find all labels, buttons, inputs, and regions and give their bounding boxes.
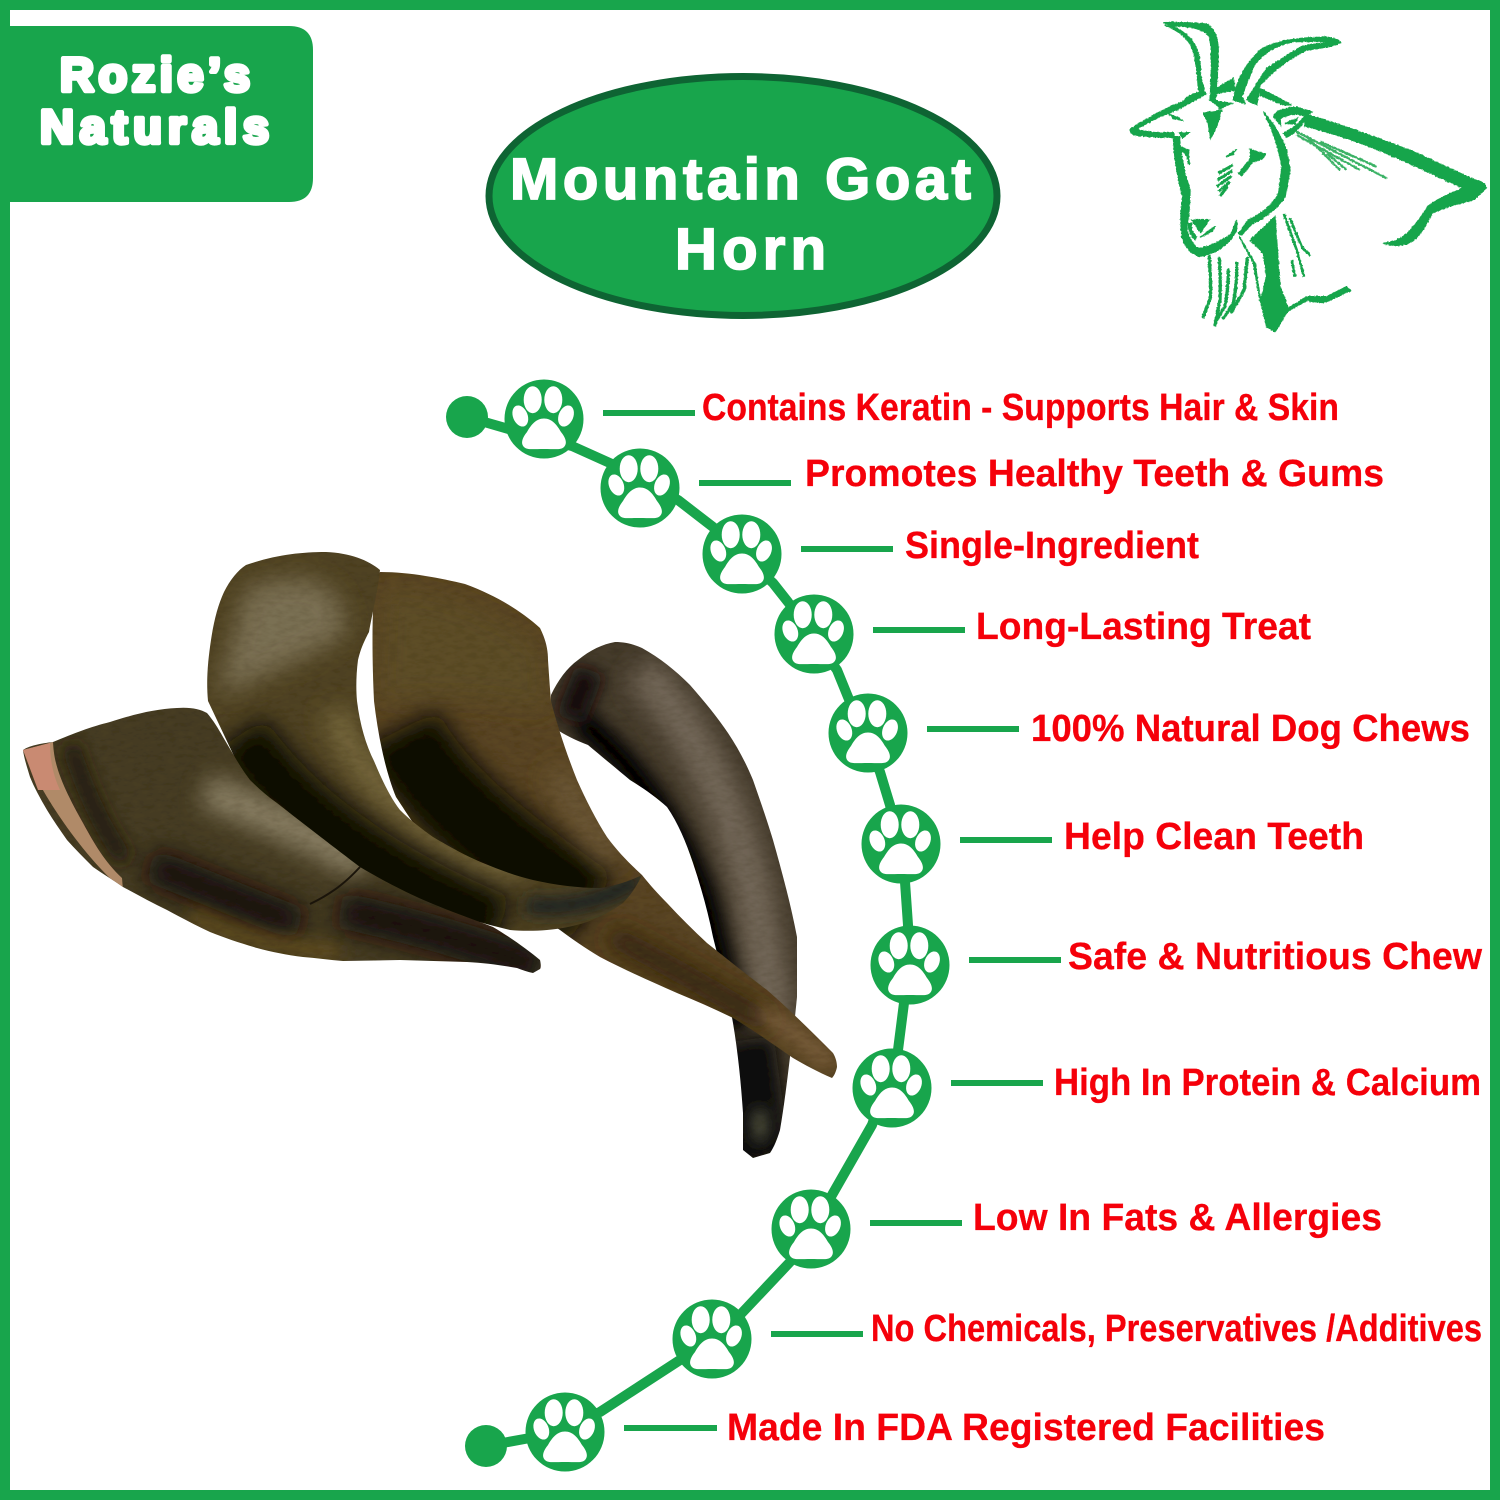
benefit 6: Help Clean Teeth: [1064, 816, 1364, 858]
benefit 7: Safe & Nutritious Chew: [1068, 936, 1482, 978]
benefit 1: [504, 380, 1339, 458]
benefit 5: [828, 694, 1470, 772]
title text: Mountain Goat: [510, 147, 971, 212]
bottom end dot: [465, 1425, 507, 1467]
benefit 2: Promotes Healthy Teeth & Gums: [805, 453, 1384, 495]
benefit 10: [672, 1300, 1482, 1378]
benefit 3: [702, 514, 1199, 594]
benefit 8: [852, 1048, 1481, 1128]
connecting curve: [467, 417, 908, 1446]
benefit 1: Contains Keratin - Supports Hair & Skin: [702, 387, 1339, 429]
benefit 2: [600, 448, 1384, 528]
benefit 4: [774, 594, 1311, 674]
horn: centre long: [360, 560, 850, 1090]
horn: front left: [20, 700, 550, 980]
benefit 4: Long-Lasting Treat: [976, 606, 1311, 648]
title text: [510, 147, 971, 282]
benefit 3: Single-Ingredient: [905, 525, 1199, 567]
product photo: goat horns: [20, 545, 850, 1170]
benefit 9: [772, 1190, 1382, 1268]
logo panel: [0, 26, 313, 202]
benefit 7: [870, 926, 1482, 1004]
logo text: Rozie’s: [60, 48, 250, 101]
logo text: [40, 48, 269, 153]
benefit 11: Made In FDA Registered Facilities: [727, 1407, 1325, 1449]
benefit 11: [526, 1392, 1325, 1472]
icon: goat head: [1130, 22, 1486, 332]
horn: centre left: [207, 552, 642, 931]
horn: right rear: [550, 642, 797, 1158]
logo text: Naturals: [40, 100, 269, 153]
benefit 5: 100% Natural Dog Chews: [1031, 708, 1470, 750]
title badge: [489, 76, 997, 316]
benefit 6: [862, 804, 1364, 884]
benefit 9: Low In Fats & Allergies: [973, 1197, 1382, 1239]
title text: Horn: [675, 217, 826, 282]
top end dot: [446, 396, 488, 438]
